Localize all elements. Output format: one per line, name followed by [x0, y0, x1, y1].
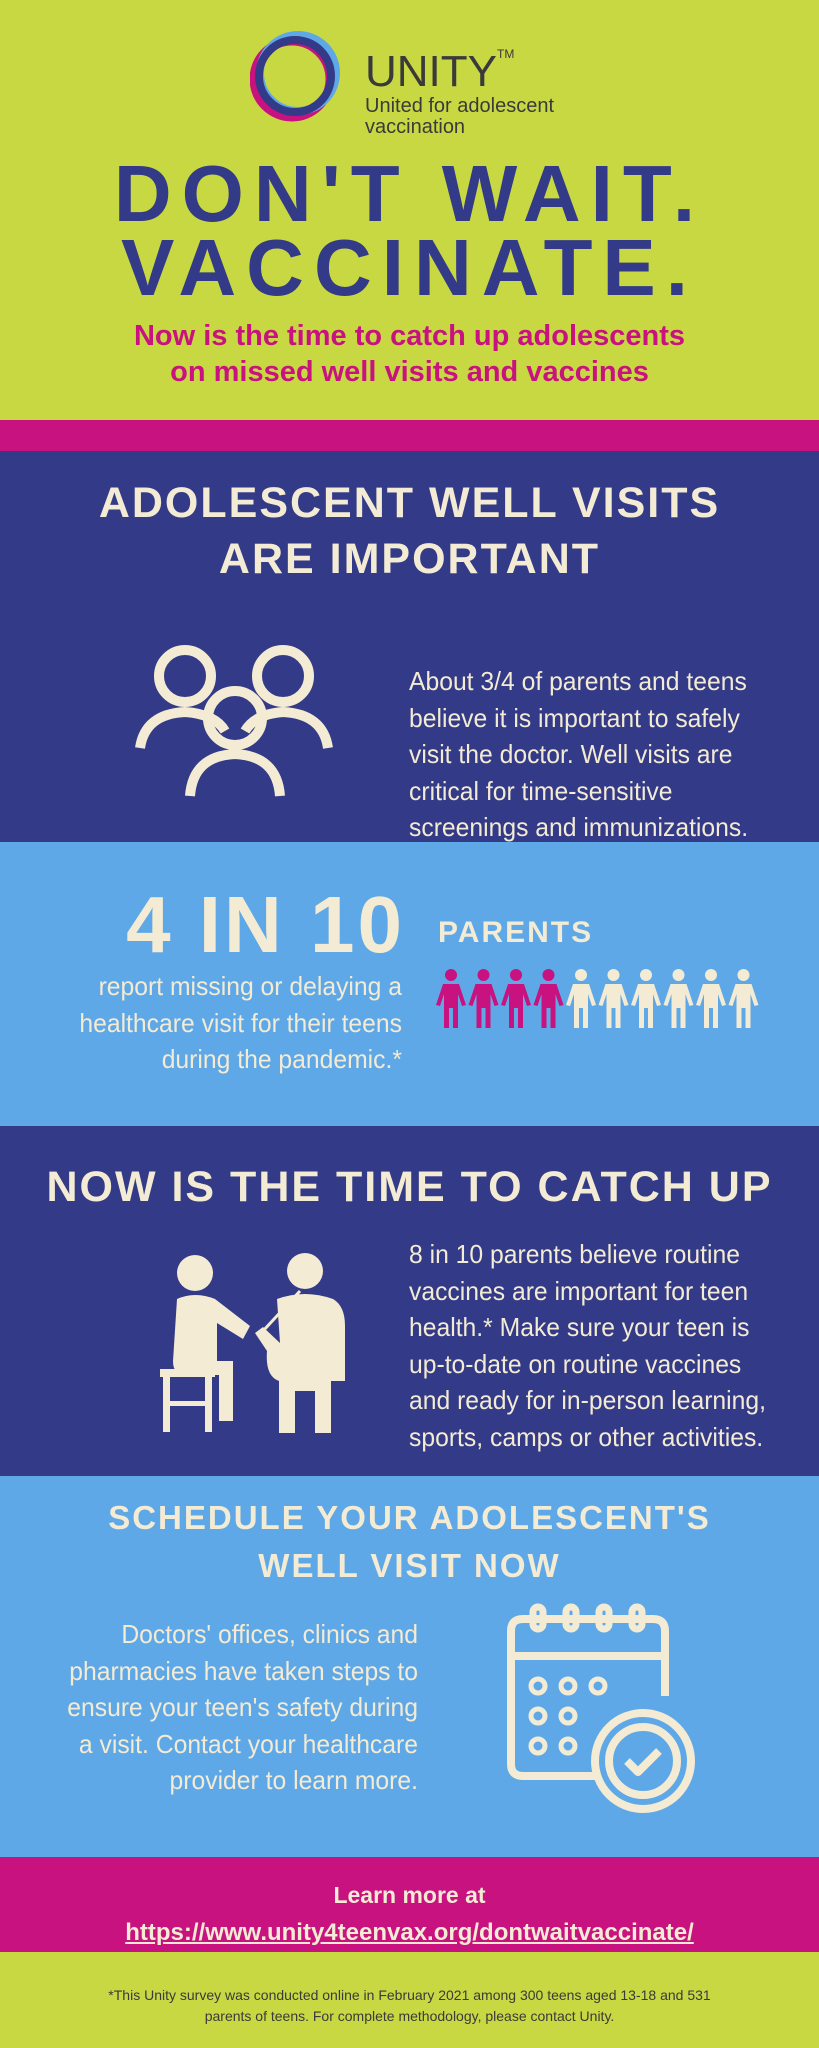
link text — [125, 1882, 694, 1946]
icon: calendar clock — [507, 1604, 695, 1813]
text block — [67, 1619, 418, 1795]
heading — [99, 479, 720, 583]
title: VACCINATE. — [121, 223, 698, 312]
panel: well visits — [0, 451, 819, 842]
text block: provider to learn more. — [170, 1765, 418, 1795]
text block: healthcare visit for their teens — [79, 1008, 402, 1038]
text block: 8 in 10 parents believe routine — [409, 1239, 740, 1269]
text block: screenings and immunizations. — [409, 812, 748, 842]
panel: header — [0, 0, 819, 420]
heading: NOW IS THE TIME TO CATCH UP — [46, 1163, 773, 1211]
footnote: *This Unity survey was conducted online in February 2021 among 300 teens aged 13-18 and 531 — [108, 1987, 711, 2003]
panel: 4 in 10 — [0, 842, 819, 1126]
text block: up-to-date on routine vaccines — [409, 1348, 741, 1378]
stat: 4 IN 10 — [126, 880, 405, 969]
logo text: vaccination — [365, 116, 465, 138]
heading: ADOLESCENT WELL VISITS — [99, 479, 720, 527]
icon: people row — [436, 969, 758, 1028]
subtitle: Now is the time to catch up adolescents — [134, 320, 685, 352]
text block: pharmacies have taken steps to — [69, 1656, 418, 1686]
heading: WELL VISIT NOW — [258, 1547, 561, 1584]
text block: health.* Make sure your teen is — [409, 1312, 750, 1342]
text block: ensure your teen's safety during — [67, 1692, 418, 1722]
text block: visit the doctor. Well visits are — [409, 739, 733, 769]
text block: About 3/4 of parents and teens — [409, 666, 747, 696]
text block: during the pandemic.* — [162, 1044, 402, 1074]
text block: believe it is important to safely — [409, 702, 740, 732]
logo — [250, 31, 554, 138]
panel: schedule — [0, 1476, 819, 1857]
text block — [409, 666, 748, 842]
panel: learn more — [0, 1857, 819, 1952]
text block: vaccines are important for teen — [409, 1276, 748, 1306]
heading: SCHEDULE YOUR ADOLESCENT'S — [108, 1499, 711, 1536]
text block — [409, 1239, 766, 1452]
text block: critical for time-sensitive — [409, 776, 673, 806]
text block: and ready for in-person learning, — [409, 1385, 766, 1415]
subtitle — [134, 320, 685, 388]
logo text: UNITYTM — [365, 47, 514, 96]
title — [114, 149, 705, 312]
subtitle: on missed well visits and vaccines — [170, 356, 649, 388]
panel: catch up — [0, 1126, 819, 1476]
logo text — [365, 47, 554, 138]
logo text: United for adolescent — [365, 95, 554, 117]
text block: a visit. Contact your healthcare — [79, 1728, 418, 1758]
text block — [79, 971, 402, 1074]
text block: Doctors' offices, clinics and — [121, 1619, 418, 1649]
footnote: parents of teens. For complete methodology, please contact Unity. — [205, 2008, 614, 2024]
text block: sports, camps or other activities. — [409, 1422, 763, 1452]
text block: report missing or delaying a — [99, 971, 402, 1001]
heading — [108, 1499, 711, 1584]
heading: ARE IMPORTANT — [219, 535, 600, 583]
link text: Learn more at — [333, 1882, 486, 1908]
panel: footer — [0, 1952, 819, 2048]
icon: doctor and patient — [160, 1253, 345, 1433]
link text: https://www.unity4teenvax.org/dontwaitvaccinate/ — [125, 1919, 694, 1946]
icon: unity ring — [250, 31, 340, 122]
footnote — [108, 1987, 711, 2024]
label: PARENTS — [438, 916, 593, 949]
title: DON'T WAIT. — [114, 149, 705, 238]
icon: people — [135, 645, 333, 796]
